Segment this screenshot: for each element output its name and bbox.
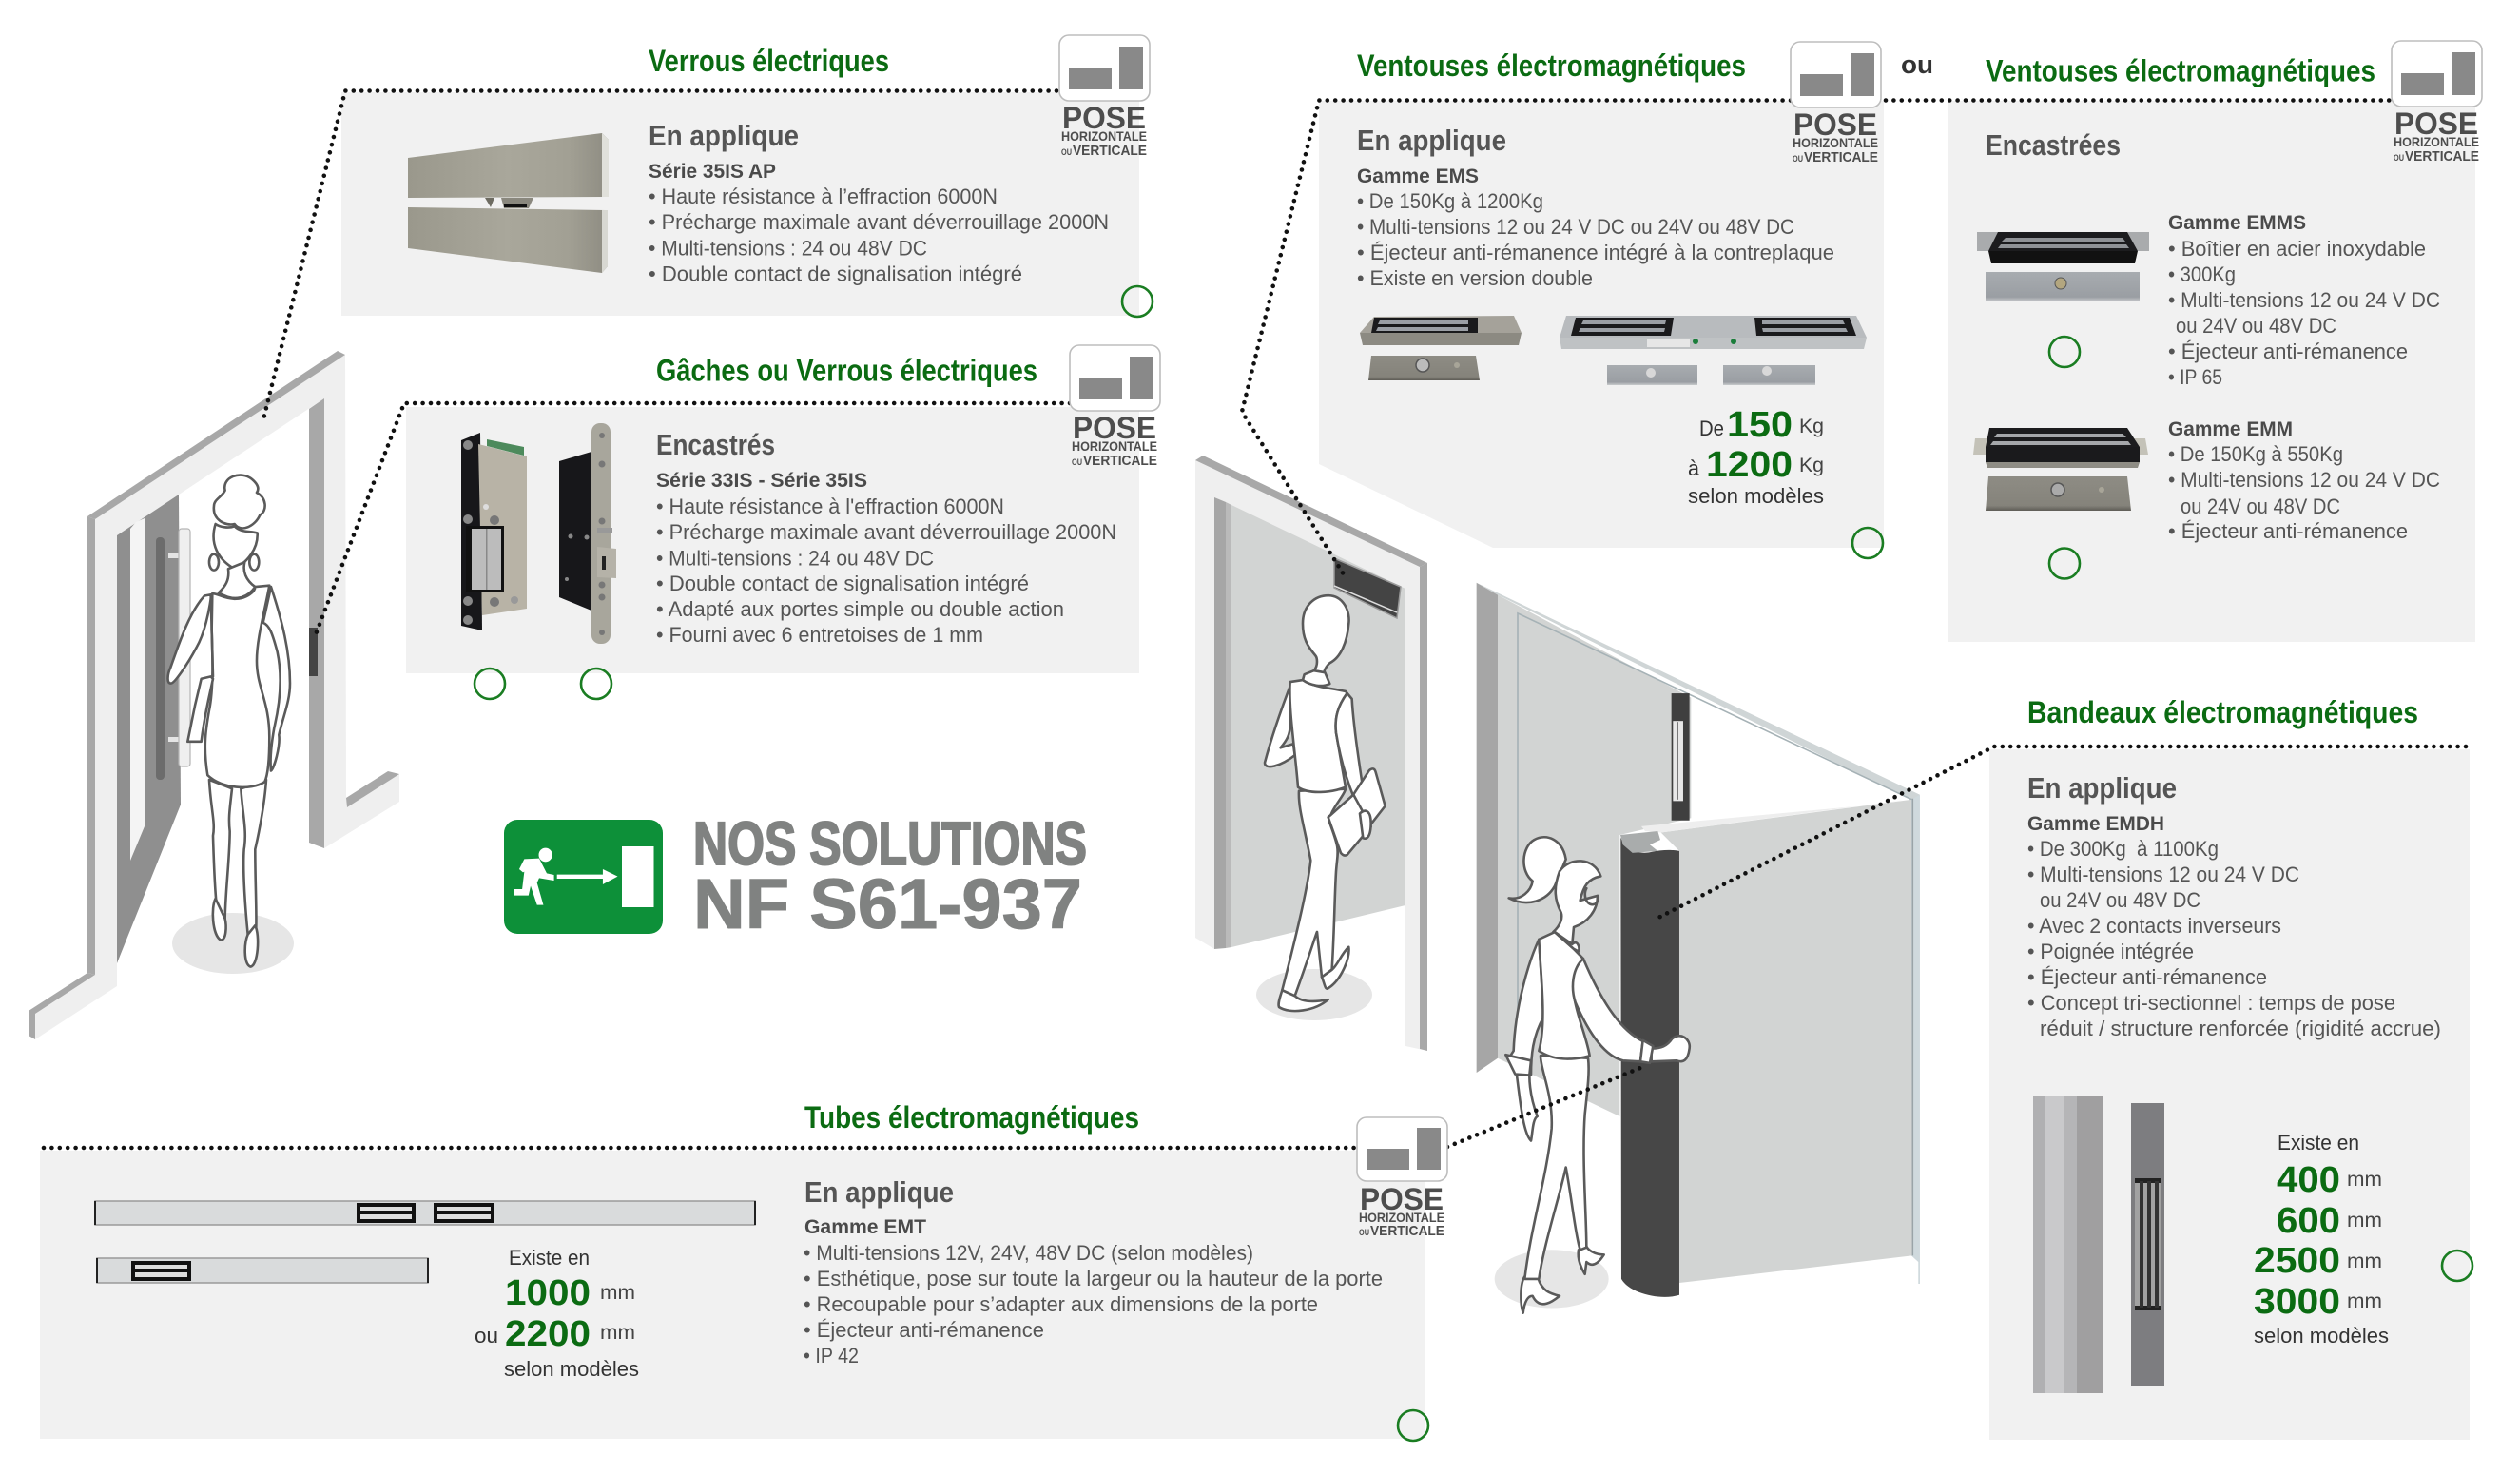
subheading: Encastrées: Encastrées (1986, 128, 2121, 162)
product: tube long (94, 1201, 756, 1225)
callout: longueurs tubes: selon modèles (504, 1357, 639, 1381)
text block: Série 35IS AP: Série 35IS AP (649, 161, 776, 183)
connector: Gâches dotted leader (316, 403, 1070, 634)
text block: Gamme EMMS: • Multi-tensions 12 ou 24 V DC (2168, 288, 2440, 312)
icon: pose horizontale ou verticale (Tubes): OU (1359, 1228, 1369, 1237)
marker ring (2049, 337, 2080, 367)
icon: pose horizontale ou verticale (Gâches): VERTICALE (1083, 453, 1157, 469)
callout: longueurs disponibles (2254, 1131, 2389, 1348)
text block: Série 35IS AP (649, 161, 1109, 285)
panel: Gâches ou Verrous background (406, 407, 1139, 673)
panel: Ventouses en applique background (1319, 101, 1884, 548)
connector: Tubes dotted leader (44, 1068, 1640, 1148)
text block: Gamme EMT: • IP 42 (804, 1344, 859, 1367)
illustration: right door with woman and bandeau (1477, 583, 1920, 1313)
callout: charge 150 à 1200 Kg: De (1699, 417, 1724, 440)
heading: Ventouses électromagnétiques: Ventouses électromagnétiques (1986, 53, 2375, 87)
callout: longueurs tubes: 2200 (505, 1314, 591, 1354)
marker ring (2442, 1251, 2472, 1281)
marker ring (2049, 548, 2080, 578)
text block: Gamme EMS: • Multi-tensions 12 ou 24 V DC ou 24V ou 48V DC (1357, 215, 1794, 239)
illustration: left door with woman (29, 351, 399, 1039)
text block: Gamme EMS: • Éjecteur anti-rémanence intégré à la contreplaque (1357, 241, 1834, 264)
text block: Gamme EMMS: • IP 65 (2168, 365, 2222, 389)
icon: pose horizontale ou verticale (Ventouses encastrées): VERTICALE (2405, 148, 2479, 165)
callout: charge 150 à 1200 Kg (1688, 405, 1824, 508)
subheading: En applique: En applique (1357, 124, 1506, 157)
text block: Gamme EMM: • De 150Kg à 550Kg (2168, 442, 2343, 466)
text block: Gamme EMDH: • Concept tri-sectionnel : temps de pose (2027, 991, 2395, 1015)
text block: Gamme EMDH: • De 300Kg à 1100Kg (2027, 837, 2219, 861)
title: Nos solutions NF S61-937: NOS SOLUTIONS (693, 809, 1087, 878)
callout: charge 150 à 1200 Kg: selon modèles (1688, 484, 1824, 508)
text block: Gamme EMT: • Esthétique, pose sur toute la largeur ou la hauteur de la porte (804, 1267, 1383, 1290)
callout: longueurs tubes: 1000 (505, 1273, 591, 1313)
callout: longueurs disponibles: mm (2347, 1210, 2382, 1232)
text block: Série 33IS - Série 35IS: • Double contact de signalisation intégré (656, 572, 1029, 595)
product: tube court (96, 1258, 429, 1283)
panel: Tubes background (40, 1151, 1425, 1439)
title: Nos solutions NF S61-937: NF S61-937 (693, 864, 1082, 943)
text block: Gamme EMDH: • Poignée intégrée (2027, 940, 2194, 963)
heading: Ventouses électromagnétiques: Ventouses électromagnétiques (1357, 48, 1746, 83)
marker ring (1122, 286, 1153, 317)
callout: charge 150 à 1200 Kg: 150 (1727, 405, 1793, 445)
panel: Bandeaux background (1989, 749, 2470, 1440)
callout: longueurs tubes: mm (600, 1322, 635, 1344)
callout: longueurs disponibles: 2500 (2254, 1241, 2340, 1281)
photo: verrou encastré (559, 423, 616, 644)
text block: Gamme EMDH: • Éjecteur anti-rémanence (2027, 965, 2267, 989)
icon: pose horizontale ou verticale (Gâches): POSE (1073, 411, 1156, 445)
callout: charge 150 à 1200 Kg: Kg (1799, 416, 1824, 437)
photo: ventouse EMM (1973, 428, 2148, 511)
subheading: En applique: En applique (804, 1175, 954, 1209)
connector: Ventouses link dotted line (1886, 98, 2393, 103)
text block: Gamme EMM: • Multi-tensions 12 ou 24 V DC (2168, 468, 2440, 492)
text block: Gamme EMT: • Multi-tensions 12V, 24V, 48V DC (selon modèles) (804, 1241, 1253, 1265)
callout: charge 150 à 1200 Kg: à (1688, 456, 1700, 480)
text block: Gamme EMMS: • Éjecteur anti-rémanence (2168, 339, 2408, 363)
text block: Série 35IS AP: • Haute résistance à l’effraction 6000N (649, 184, 998, 208)
icon: pose horizontale ou verticale (Verrous): HORIZONTALE (1061, 128, 1147, 144)
text block: Série 33IS - Série 35IS: • Haute résistance à l'effraction 6000N (656, 495, 1004, 518)
icon: pose horizontale ou verticale (Ventouses en applique): POSE (1793, 107, 1877, 142)
icon: pose horizontale ou verticale (Verrous) (1059, 35, 1150, 159)
text block: Série 33IS - Série 35IS: • Multi-tensions : 24 ou 48V DC (656, 546, 934, 571)
text block: Gamme EMMS: • 300Kg (2168, 262, 2236, 286)
icon: exit sign (504, 820, 663, 934)
photo: verrou en applique (408, 133, 609, 273)
photo: profilé bandeau (2033, 1096, 2103, 1393)
text block: Gamme EMT: • Recoupable pour s’adapter aux dimensions de la porte (804, 1292, 1318, 1316)
callout: longueurs disponibles: mm (2347, 1169, 2382, 1191)
text block: Gamme EMM: ou 24V ou 48V DC (2181, 495, 2340, 518)
marker ring (1398, 1410, 1428, 1441)
panel: Verrous électriques background (341, 92, 1139, 316)
photo: ventouse simple (1360, 316, 1522, 380)
text block: Gamme EMT: Gamme EMT (804, 1216, 926, 1238)
icon: pose horizontale ou verticale (Tubes): POSE (1360, 1182, 1444, 1216)
icon: pose horizontale ou verticale (Ventouses encastrées) (2392, 41, 2482, 165)
icon: pose horizontale ou verticale (Verrous): OU (1061, 147, 1072, 157)
icon: pose horizontale ou verticale (Ventouses encastrées): POSE (2394, 107, 2478, 141)
separator word: ou: ou (1901, 50, 1933, 79)
text block: Série 33IS - Série 35IS: Série 33IS - Série 35IS (656, 470, 867, 492)
icon: pose horizontale ou verticale (Ventouses en applique): VERTICALE (1804, 149, 1878, 165)
text block: Série 33IS - Série 35IS (656, 470, 1116, 647)
icon: pose horizontale ou verticale (Tubes): HORIZONTALE (1359, 1210, 1444, 1225)
callout: longueurs disponibles: Existe en (2278, 1131, 2359, 1154)
icon: pose horizontale ou verticale (Tubes) (1357, 1117, 1447, 1239)
heading: Gâches ou Verrous électriques: Gâches ou Verrous électriques (656, 354, 1037, 388)
subheading: En applique: En applique (649, 119, 799, 152)
text block: Série 35IS AP: • Double contact de signalisation intégré (649, 262, 1022, 285)
heading: Bandeaux électromagnétiques: Bandeaux électromagnétiques (2027, 695, 2418, 729)
icon: pose horizontale ou verticale (Ventouses encastrées): HORIZONTALE (2394, 134, 2479, 149)
text block: Gamme EMS: • Existe en version double (1357, 266, 1593, 290)
title: Nos solutions NF S61-937 (693, 809, 1087, 943)
icon: pose horizontale ou verticale (Gâches) (1070, 345, 1160, 469)
text block: Gamme EMS: Gamme EMS (1357, 165, 1479, 187)
text block: Gamme EMMS: • Boîtier en acier inoxydable (2168, 237, 2426, 261)
callout: longueurs tubes: mm (600, 1282, 635, 1304)
text block: Gamme EMM (2168, 418, 2440, 543)
callout: longueurs disponibles: mm (2347, 1290, 2382, 1312)
text block: Série 35IS AP: • Multi-tensions : 24 ou 48V DC (649, 236, 927, 261)
text block: Gamme EMM: • Éjecteur anti-rémanence (2168, 519, 2408, 543)
icon: pose horizontale ou verticale (Verrous): VERTICALE (1073, 143, 1147, 159)
panel content: Verrous électriques (408, 44, 1153, 317)
text block: Série 33IS - Série 35IS: • Fourni avec 6 entretoises de 1 mm (656, 623, 983, 647)
text block: Gamme EMMS (2168, 212, 2440, 389)
icon: pose horizontale ou verticale (Tubes): VERTICALE (1370, 1223, 1444, 1239)
text block: Gamme EMS: • De 150Kg à 1200Kg (1357, 189, 1543, 213)
connector: Verrous dotted leader (262, 91, 1056, 423)
callout: longueurs tubes (475, 1246, 639, 1381)
icon: pose horizontale ou verticale (Verrous): POSE (1062, 101, 1146, 135)
text block: Gamme EMDH (2027, 813, 2441, 1040)
connector: Bandeaux dotted leader (1657, 747, 2466, 919)
marker ring (1852, 528, 1883, 558)
callout: longueurs disponibles: 400 (2277, 1160, 2340, 1200)
callout: charge 150 à 1200 Kg: 1200 (1706, 445, 1793, 485)
subheading: En applique: En applique (2027, 771, 2177, 805)
panel content: Ventouses en applique (1357, 48, 1883, 558)
text block: Gamme EMDH: • Avec 2 contacts inverseurs (2027, 914, 2281, 938)
callout: longueurs tubes: Existe en (509, 1246, 590, 1270)
icon: pose horizontale ou verticale (Ventouses encastrées): OU (2394, 153, 2404, 163)
photo: bandeau ventouse (2131, 1103, 2164, 1386)
panel content: Bandeaux électromagnétiques (2027, 695, 2472, 1393)
panel: Ventouses encastrées background (1948, 101, 2475, 642)
heading: Verrous électriques: Verrous électriques (649, 44, 889, 78)
text block: Gamme EMMS: ou 24V ou 48V DC (2176, 314, 2336, 338)
icon: pose horizontale ou verticale (Ventouses en applique): OU (1793, 154, 1803, 164)
icon: pose horizontale ou verticale (Ventouses en applique): HORIZONTALE (1793, 135, 1878, 150)
text block: Gamme EMDH: • Multi-tensions 12 ou 24 V DC (2027, 863, 2299, 886)
subheading: Encastrés: Encastrés (656, 428, 775, 461)
text block: Série 33IS - Série 35IS: • Adapté aux portes simple ou double action (656, 597, 1064, 621)
text block: Gamme EMT: • Éjecteur anti-rémanence (804, 1318, 1044, 1342)
callout: longueurs disponibles: selon modèles (2254, 1324, 2389, 1348)
text block: Gamme EMS (1357, 165, 1834, 290)
text block: Gamme EMDH: ou 24V ou 48V DC (2040, 888, 2200, 912)
panel content: Ventouses encastrées (1973, 53, 2440, 578)
photo: gâche électrique (461, 433, 527, 630)
icon: pose horizontale ou verticale (Gâches): HORIZONTALE (1072, 438, 1157, 454)
callout: charge 150 à 1200 Kg: Kg (1799, 455, 1824, 476)
connector: Ventouses dotted leader (1242, 101, 1791, 574)
photo: ventouse EMMS (1977, 232, 2149, 301)
text block: Gamme EMDH: Gamme EMDH (2027, 813, 2164, 835)
panel content: Tubes électromagnétiques (94, 1100, 1428, 1441)
marker rings (475, 669, 611, 699)
heading: Tubes électromagnétiques: Tubes électromagnétiques (804, 1100, 1139, 1135)
photo: ventouse double (1560, 316, 1867, 385)
panel content: Gâches ou Verrous électriques (461, 354, 1116, 699)
callout: longueurs disponibles: mm (2347, 1251, 2382, 1272)
icon: pose horizontale ou verticale (Gâches): OU (1072, 457, 1082, 467)
illustration: centre door with man (1195, 456, 1427, 1051)
text block: Gamme EMM: Gamme EMM (2168, 418, 2293, 440)
icon: pose horizontale ou verticale (Ventouses en applique) (1791, 42, 1881, 165)
text block: Gamme EMMS: Gamme EMMS (2168, 212, 2306, 234)
text block: Gamme EMDH: réduit / structure renforcée (rigidité accrue) (2040, 1017, 2441, 1040)
text block: Série 33IS - Série 35IS: • Précharge maximale avant déverrouillage 2000N (656, 520, 1116, 544)
callout: longueurs disponibles: 600 (2277, 1201, 2340, 1241)
text block: Série 35IS AP: • Précharge maximale avant déverrouillage 2000N (649, 210, 1109, 234)
callout: longueurs tubes: ou (475, 1324, 498, 1348)
text block: Gamme EMT (804, 1216, 1383, 1367)
callout: longueurs disponibles: 3000 (2254, 1282, 2340, 1322)
